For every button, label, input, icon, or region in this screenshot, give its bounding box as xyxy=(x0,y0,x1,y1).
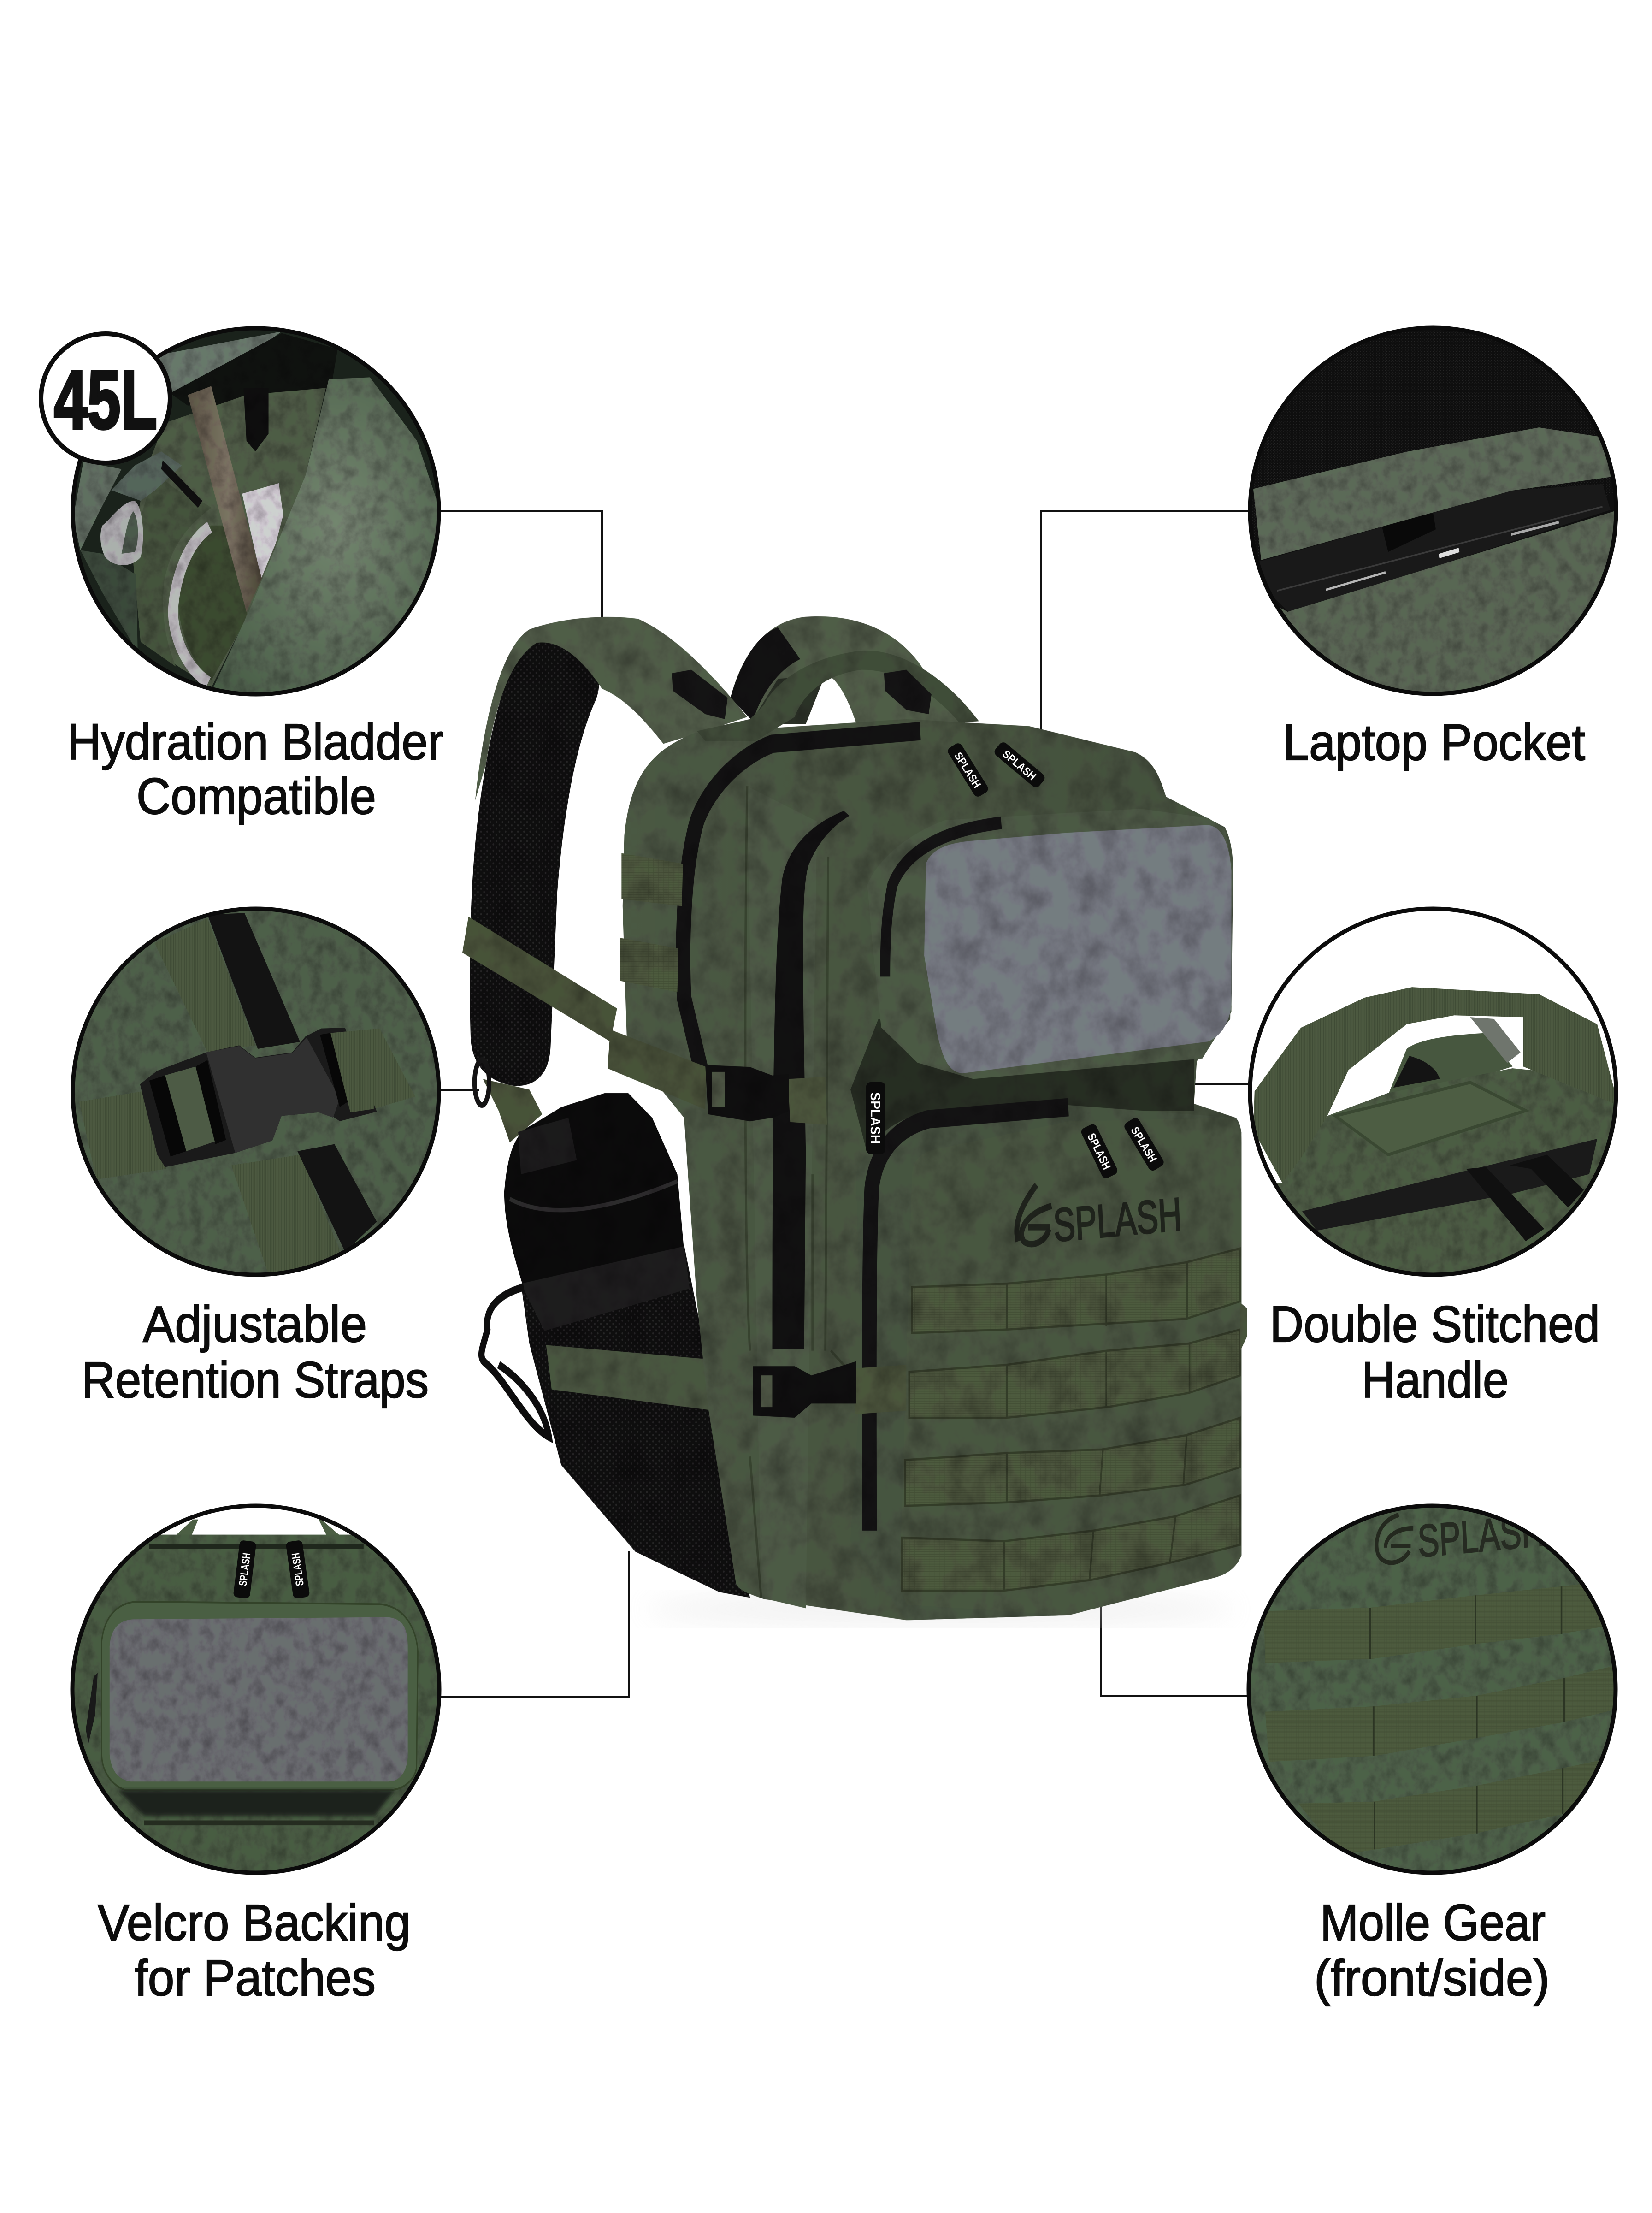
lower pocket zipper xyxy=(869,1107,1068,1531)
circle outline xyxy=(73,328,439,694)
circle outline xyxy=(1249,1506,1616,1873)
panel: laptop pocket detail xyxy=(1245,323,1622,720)
circle outline xyxy=(73,909,439,1275)
label: adjustable retention straps: Adjustable xyxy=(143,1296,367,1353)
buckle scene xyxy=(69,904,447,1282)
far shoulder strap xyxy=(731,616,965,724)
label: molle gear (front/side) xyxy=(1314,1894,1550,2006)
molle row 2 xyxy=(1265,1664,1621,1762)
seam lines xyxy=(745,786,856,1598)
top zipper line xyxy=(149,1544,364,1550)
zipper top xyxy=(207,913,300,1049)
clipped SPLASH wordmark: SPLASH xyxy=(1416,1504,1546,1567)
molle row 2 xyxy=(909,1330,1240,1418)
label: adjustable retention straps: Retention Straps xyxy=(82,1352,429,1408)
label: hydration bladder compatible: Compatible xyxy=(136,768,376,825)
embroidered logo mark xyxy=(1017,1185,1051,1244)
molle row 1 xyxy=(912,1249,1240,1333)
right fabric sheet xyxy=(208,377,441,698)
molle row 4 xyxy=(902,1495,1240,1591)
velcro patch xyxy=(110,1617,408,1781)
molle row 1 xyxy=(1264,1580,1621,1663)
zipper: middle compartment xyxy=(772,811,850,1349)
stitched tab xyxy=(1335,1083,1526,1155)
ground shadow xyxy=(645,1593,1235,1625)
badge: 45L capacity xyxy=(41,334,170,463)
badge: 45L capacity: 45L xyxy=(54,354,157,446)
dark shadow below pocket xyxy=(118,1790,395,1816)
strap adjuster buckle left xyxy=(672,670,728,719)
molle scene xyxy=(1245,1500,1622,1881)
velcro panel zipper pull right xyxy=(286,1540,310,1599)
middle side release buckle xyxy=(705,1065,789,1121)
side release buckle xyxy=(140,1028,379,1167)
zipper pull lower right xyxy=(1123,1116,1165,1172)
drawcord xyxy=(482,1287,549,1437)
zipper pull top right xyxy=(993,740,1046,789)
backpack product illustration xyxy=(462,616,1247,1625)
infographic canvas xyxy=(39,325,1618,2006)
zipper pull top left: SPLASH xyxy=(951,750,983,790)
handle scene xyxy=(1245,904,1622,1285)
fabric background xyxy=(1245,1500,1621,1881)
back mesh xyxy=(1248,325,1618,558)
zipper: main compartment xyxy=(683,731,920,1076)
zipper pull vertical xyxy=(866,1082,885,1154)
handle webbing xyxy=(1253,987,1618,1183)
lower pocket face xyxy=(900,1118,1241,1615)
small side molle loops xyxy=(620,853,683,992)
velcro panel zipper pull left xyxy=(233,1540,256,1599)
green backing xyxy=(67,1535,451,1885)
side zipper pull xyxy=(86,1673,98,1744)
zipper pull top left xyxy=(946,741,990,799)
organizer pocket xyxy=(867,809,1233,1079)
zipper pull top right: SPLASH xyxy=(1000,748,1038,783)
top black recess xyxy=(170,333,337,406)
panel: velcro backing detail xyxy=(67,1503,451,1885)
drink tube xyxy=(188,386,262,612)
dark strap in bladder xyxy=(161,460,202,508)
webbing column bottom xyxy=(231,1155,340,1282)
white bladder label xyxy=(242,483,283,579)
zipper pull lower left: SPLASH xyxy=(1085,1131,1113,1172)
side panel shading xyxy=(747,786,817,1608)
webbing column top xyxy=(154,918,255,1053)
label: velcro backing for patches xyxy=(98,1894,411,2006)
strap right xyxy=(330,1029,415,1116)
label: hydration bladder compatible: Hydration Bladder xyxy=(67,714,443,770)
label: molle gear (front/side): Molle Gear xyxy=(1320,1894,1546,1951)
back strap bump xyxy=(1388,1033,1512,1095)
pocket lower zipper tape xyxy=(1302,1139,1597,1231)
gap shadow under organizer pocket xyxy=(850,1019,1194,1174)
hydration scene xyxy=(73,329,441,698)
circle outline xyxy=(1250,909,1616,1275)
strap adjuster buckle right xyxy=(884,670,932,714)
organizer zipper xyxy=(885,823,1001,976)
velcro scene xyxy=(67,1503,451,1885)
label: double stitched handle: Handle xyxy=(1362,1352,1509,1408)
bladder lid interior xyxy=(178,526,247,681)
embroidered SPLASH wordmark: SPLASH xyxy=(1052,1189,1183,1251)
lower side release buckle xyxy=(753,1361,856,1418)
leader line: molle gear xyxy=(1101,1604,1248,1696)
top handle xyxy=(697,651,979,741)
label: molle gear (front/side): (front/side) xyxy=(1314,1950,1550,2006)
laptop xyxy=(1258,484,1611,613)
lower pocket side wall xyxy=(850,1105,1241,1620)
zipper bottom xyxy=(297,1144,377,1252)
left fabric xyxy=(73,462,122,550)
bite valve xyxy=(100,451,182,565)
laptop pocket scene xyxy=(1245,323,1622,720)
zipper pull lower left xyxy=(1080,1123,1119,1180)
label: laptop pocket: Laptop Pocket xyxy=(1283,714,1585,771)
lower side compression strap xyxy=(546,1345,755,1415)
velcro patch xyxy=(924,825,1232,1073)
pocket seam xyxy=(102,1602,418,1790)
main body xyxy=(623,719,1241,1620)
label: adjustable retention straps xyxy=(82,1296,429,1408)
water bottle xyxy=(504,1093,684,1289)
zipper pull lower right: SPLASH xyxy=(1128,1124,1159,1165)
near shoulder strap padding xyxy=(470,629,599,1086)
leader line: velcro backing xyxy=(440,1551,629,1697)
lower strap xyxy=(483,1079,542,1142)
label: hydration bladder compatible xyxy=(67,714,443,825)
velcro panel zipper pull left: SPLASH xyxy=(237,1552,253,1586)
molle row 3 xyxy=(1298,1756,1621,1855)
velcro panel zipper pull right: SPLASH xyxy=(289,1552,307,1586)
bump dark interior xyxy=(1393,1056,1440,1088)
bladder body xyxy=(132,388,326,688)
lower compression strap right xyxy=(855,1365,906,1414)
near shoulder strap top xyxy=(475,617,747,800)
strap ring xyxy=(475,1060,489,1105)
panel: hydration bladder detail xyxy=(73,328,441,698)
leader line: handle xyxy=(1192,1083,1250,1085)
ribbed bladder shoulder xyxy=(132,469,211,667)
logo mark xyxy=(1377,1515,1413,1563)
strap left xyxy=(79,1091,166,1179)
backpack body and straps xyxy=(462,616,1247,1620)
right side tab xyxy=(1240,1302,1247,1351)
circle outline xyxy=(1250,328,1616,694)
leader line: laptop pocket xyxy=(1041,511,1249,730)
fabric background xyxy=(70,904,446,1282)
label: velcro backing for patches: Velcro Backing xyxy=(98,1894,411,1951)
handle far tab xyxy=(1470,1017,1521,1063)
base fabric xyxy=(1248,1068,1618,1285)
panel: double stitched handle detail xyxy=(1245,904,1622,1285)
bladder white ring xyxy=(173,527,210,682)
collar fabric xyxy=(159,332,281,392)
load lifter strap xyxy=(462,917,617,1041)
label: velcro backing for patches: for Patches xyxy=(135,1950,376,2006)
pocket top flap xyxy=(1253,427,1618,560)
middle compression strap xyxy=(608,1030,827,1125)
leader line: retention straps xyxy=(440,1089,479,1091)
leader line: hydration bladder xyxy=(440,511,602,620)
label: double stitched handle: Double Stitched xyxy=(1270,1296,1600,1353)
lower pocket fabric xyxy=(1248,510,1618,720)
lower left hose xyxy=(80,550,138,652)
panel: retention strap buckle detail xyxy=(69,904,447,1282)
label: double stitched handle xyxy=(1270,1296,1600,1408)
circle outline xyxy=(72,1506,439,1873)
molle row 3 xyxy=(905,1418,1240,1506)
handle arc edges xyxy=(176,1520,340,1535)
mesh pocket cuff xyxy=(521,1246,690,1331)
bottom zipper line xyxy=(144,1820,374,1826)
side mesh pocket xyxy=(521,1245,750,1598)
zipper pulls xyxy=(1466,1155,1584,1241)
laptop rim and ports xyxy=(1277,507,1603,591)
zipper pull vertical: SPLASH xyxy=(867,1092,883,1144)
panel: molle gear detail xyxy=(1245,1500,1622,1881)
black clip xyxy=(243,388,269,451)
